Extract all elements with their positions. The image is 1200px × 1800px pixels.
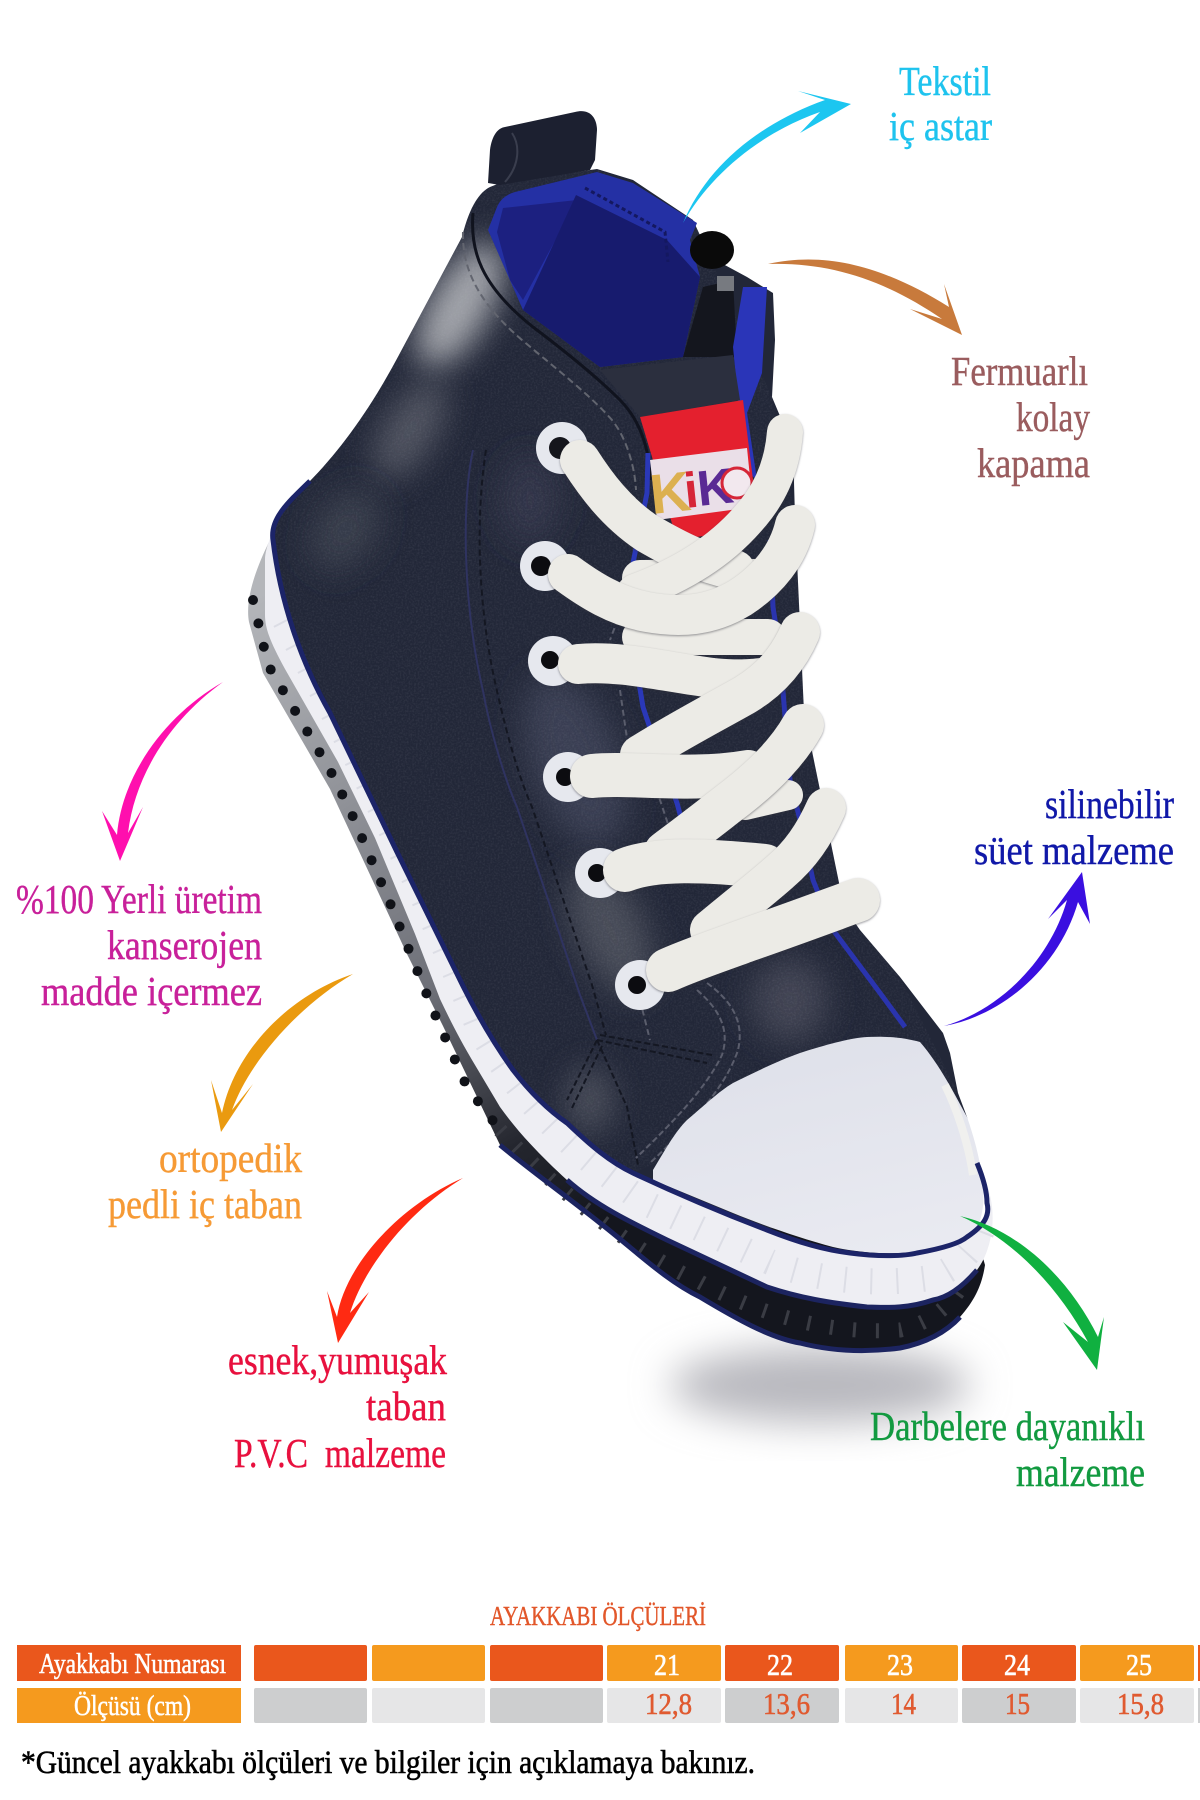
footnote: *Güncel ayakkabı ölçüleri ve bilgiler için açıklamaya bakınız. [21, 1745, 755, 1781]
white foxing band [265, 481, 993, 1307]
label: %100 Yerli üretim: madde içermez [41, 968, 262, 1014]
brand label: i [681, 462, 701, 519]
row: measurements: 13,6 [763, 1686, 810, 1721]
label: %100 Yerli üretim [16, 876, 262, 1014]
heading: shoe sizes: AYAKKABI ÖLÇÜLERİ [490, 1601, 706, 1631]
label: silinebilir süet malzeme: silinebilir [1045, 781, 1174, 827]
label: esnek yumuşak taban: taban [366, 1383, 446, 1429]
label: Darbelere dayanıklı malzeme [870, 1403, 1145, 1495]
eyelets [520, 422, 665, 1010]
arrow: brown, zipper [768, 260, 962, 335]
row: measurements [254, 1686, 1200, 1723]
white laces [568, 432, 858, 970]
row header: size in cm [17, 1688, 241, 1723]
brand label [640, 400, 753, 540]
toe cap [653, 1037, 984, 1253]
zipper [683, 231, 767, 480]
floor shadow [670, 1347, 970, 1423]
row: shoe numbers: 25 [1126, 1647, 1152, 1682]
row: shoe numbers: 21 [654, 1647, 680, 1682]
label: Fermuarlı kolay kapama: Fermuarlı [951, 348, 1088, 394]
label: ortopedik pedli iç taban: ortopedik [159, 1135, 302, 1181]
outsole tread [248, 540, 985, 1351]
seams and stitching [463, 213, 905, 1165]
label: Fermuarlı kolay kapama: kolay [1016, 394, 1090, 440]
row: shoe numbers [254, 1645, 1200, 1682]
label: esnek yumuşak taban: esnek,yumuşak [228, 1337, 447, 1383]
row: measurements: 15 [1005, 1686, 1030, 1721]
label: %100 Yerli üretim: %100 Yerli üretim [16, 876, 262, 922]
row: shoe numbers: 23 [887, 1647, 913, 1682]
label: Fermuarlı kolay kapama [951, 348, 1090, 486]
brand label: K [647, 459, 693, 526]
arrow: cyan, textile lining [683, 91, 851, 223]
arrow: orange, insole [211, 974, 353, 1132]
label: ortopedik pedli iç taban [108, 1135, 302, 1227]
label: ortopedik pedli iç taban: pedli iç taban [108, 1181, 302, 1227]
label: Darbelere dayanıklı malzeme: Darbelere dayanıklı [870, 1403, 1145, 1449]
tongue [600, 355, 740, 417]
arrow: green, impact resistant [960, 1216, 1104, 1370]
row: measurements: 15,8 [1117, 1686, 1164, 1721]
label: %100 Yerli üretim: kanserojen [107, 922, 262, 968]
label: Tekstil iç astar: Tekstil [899, 58, 991, 104]
icon: heel pull tab [488, 111, 597, 185]
arrow: magenta, local production [102, 682, 223, 861]
label: esnek yumuşak taban: P.V.C malzeme [234, 1430, 446, 1476]
row: shoe numbers: 24 [1004, 1647, 1030, 1682]
arrow: red, sole [327, 1178, 463, 1343]
label: Tekstil iç astar: iç astar [889, 103, 992, 149]
row header: shoe number: Ayakkabı Numarası [39, 1649, 226, 1680]
brand label: K [694, 457, 736, 517]
label: Fermuarlı kolay kapama: kapama [977, 440, 1090, 486]
label: silinebilir süet malzeme: süet malzeme [974, 827, 1174, 873]
label: Tekstil iç astar [889, 58, 992, 149]
row: measurements: 12,8 [645, 1686, 692, 1721]
textile lining [488, 172, 700, 367]
row header: size in cm: Ölçüsü (cm) [74, 1691, 191, 1722]
label: esnek yumuşak taban [228, 1337, 447, 1476]
shoe [248, 111, 993, 1351]
row: measurements: 14 [891, 1686, 916, 1721]
row: shoe numbers: 22 [767, 1647, 793, 1682]
arrow: blue, suede [944, 872, 1090, 1026]
navy piping [273, 481, 988, 1256]
upper: navy leather [250, 169, 990, 1230]
label: silinebilir süet malzeme [974, 781, 1174, 873]
label: Darbelere dayanıklı malzeme: malzeme [1016, 1449, 1145, 1495]
size table [17, 1645, 1200, 1723]
